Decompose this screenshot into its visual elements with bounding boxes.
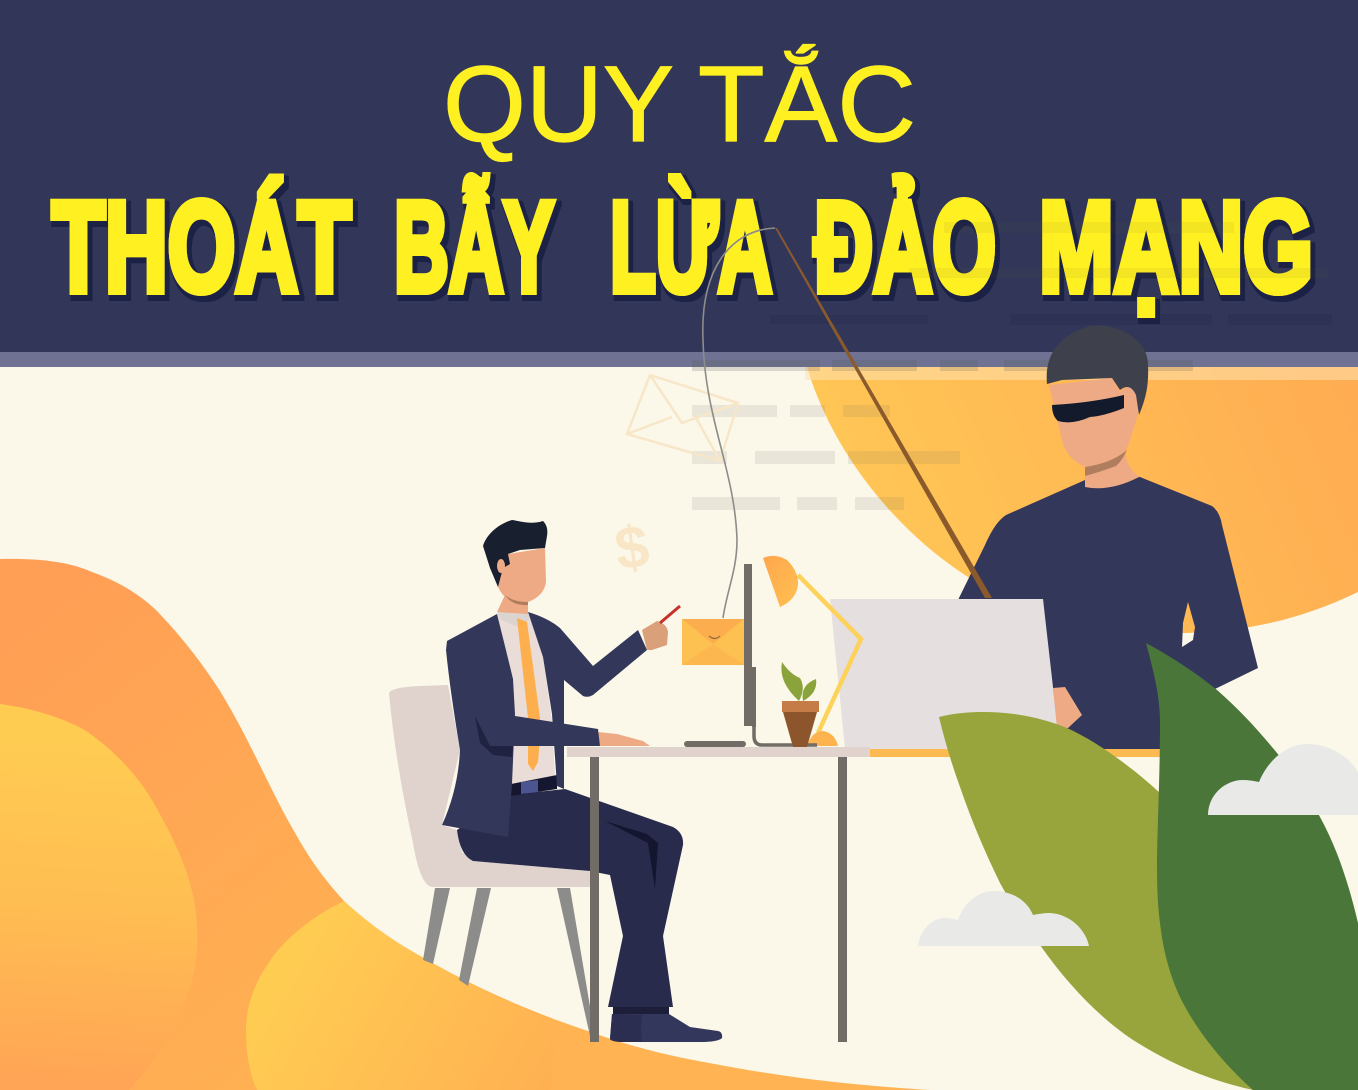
collar xyxy=(497,612,529,627)
potted plant xyxy=(781,662,819,747)
neck xyxy=(497,595,528,614)
title line 2 xyxy=(52,175,1313,319)
businessman xyxy=(389,520,722,1042)
title line 2: ĐẢO xyxy=(814,175,996,319)
desk lamp xyxy=(763,556,861,746)
faint phishing email decoration xyxy=(611,375,960,583)
shirt xyxy=(497,612,555,784)
trouser fold xyxy=(605,821,658,889)
thief sweater xyxy=(958,477,1258,750)
belt xyxy=(511,775,557,796)
hair xyxy=(483,520,547,587)
title line 2: LỪA xyxy=(610,176,772,319)
monitor xyxy=(684,564,817,747)
tie xyxy=(517,618,540,771)
title line 1 xyxy=(443,43,916,164)
thief neck shadow xyxy=(1085,450,1127,476)
orange circle backdrop xyxy=(805,360,1358,633)
dark green leaf xyxy=(1146,643,1358,1090)
lower yellow wave xyxy=(246,901,554,1090)
chair xyxy=(389,685,590,887)
title line 2: BẪY xyxy=(394,175,554,319)
jaw shadow xyxy=(505,595,528,605)
olive leaf xyxy=(939,712,1253,1090)
light strip on circle xyxy=(805,367,1358,380)
thief hair xyxy=(1047,326,1148,415)
header lower strip xyxy=(0,352,1358,367)
dollar sign: $ xyxy=(611,512,653,583)
hand holding pen xyxy=(642,621,668,650)
face xyxy=(495,548,546,602)
shoes xyxy=(610,1007,722,1042)
thief face and neck xyxy=(1049,378,1141,488)
trousers xyxy=(457,789,683,1007)
fishing line xyxy=(703,228,775,618)
thief xyxy=(958,326,1258,750)
faint overlay lines on title xyxy=(909,222,1329,278)
pen xyxy=(660,606,680,623)
faint code lines across header xyxy=(692,314,1332,371)
resting hand xyxy=(598,732,650,746)
title line 2: THOÁT xyxy=(52,176,351,319)
title line 1: QUY xyxy=(443,43,674,164)
jacket left panel xyxy=(442,614,515,837)
jacket right panel and raised arm xyxy=(528,612,647,789)
thief blindfold mask xyxy=(1052,395,1124,422)
fishing rod xyxy=(775,228,992,598)
chair legs xyxy=(423,888,594,1036)
left orange wave blob xyxy=(0,559,930,1090)
title line 1: TẮC xyxy=(698,43,916,164)
phishing envelope xyxy=(682,619,744,665)
cloud right xyxy=(1208,744,1358,815)
inner yellow wave xyxy=(0,704,197,1090)
thief hand xyxy=(1053,687,1082,728)
desk xyxy=(567,747,1162,1042)
sleeve xyxy=(473,714,600,746)
belt buckle xyxy=(521,780,538,794)
ear xyxy=(497,559,505,573)
laptop screen xyxy=(830,599,1060,749)
header band xyxy=(0,0,1358,352)
sleeve fold xyxy=(475,716,513,757)
cloud left xyxy=(918,891,1089,946)
